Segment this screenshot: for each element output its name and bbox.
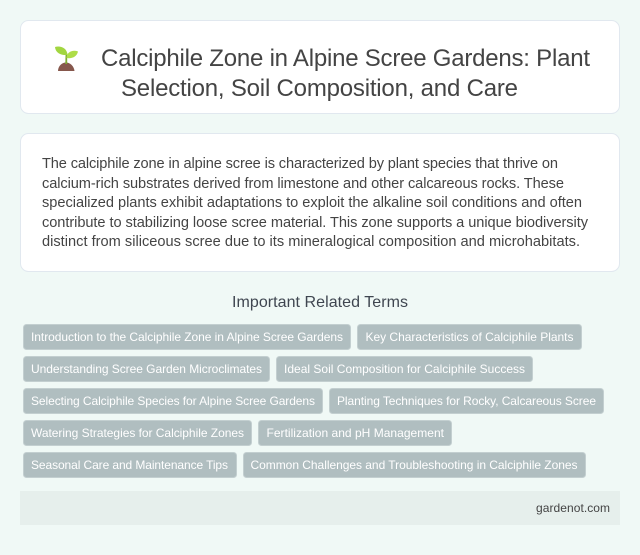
tag: Understanding Scree Garden Microclimates — [31, 362, 262, 376]
icon: seedling — [55, 47, 78, 71]
tag: Seasonal Care and Maintenance Tips — [31, 458, 228, 472]
footer domain: gardenot.com — [536, 501, 610, 515]
title card — [20, 20, 620, 114]
tag: Selecting Calciphile Species for Alpine Scree Gardens — [31, 394, 315, 408]
tag — [358, 324, 582, 350]
heading: related terms: Important Related Terms — [232, 294, 408, 311]
tag: Planting Techniques for Rocky, Calcareous Scree — [337, 394, 596, 408]
tag: Common Challenges and Troubleshooting in Calciphile Zones — [250, 458, 578, 472]
summary paragraph: distinct from siliceous scree due to its mineralogical composition and microhabitats. — [42, 234, 580, 250]
title text — [101, 45, 590, 102]
footer bar — [20, 491, 620, 525]
tag: Ideal Soil Composition for Calciphile Success — [284, 362, 525, 376]
summary paragraph — [42, 156, 589, 250]
summary card — [20, 134, 620, 272]
tag: Introduction to the Calciphile Zone in Alpine Scree Gardens — [31, 330, 343, 344]
summary paragraph: specialized plants exhibit adaptations to exploit the alkaline soil conditions and often — [42, 195, 582, 211]
tag — [24, 356, 270, 382]
tag — [24, 452, 236, 478]
tag: Watering Strategies for Calciphile Zones — [31, 426, 244, 440]
summary paragraph: contribute to stabilizing loose scree material. This zone supports a unique biodiversity — [42, 215, 589, 231]
title text: Calciphile Zone in Alpine Scree Gardens: Plant — [101, 45, 590, 72]
tag — [258, 420, 452, 446]
tags list — [24, 324, 604, 478]
summary paragraph: The calciphile zone in alpine scree is characterized by plant species that thrive on — [42, 156, 558, 172]
tag — [24, 420, 252, 446]
title text: Selection, Soil Composition, and Care — [121, 75, 518, 102]
tag — [244, 452, 586, 478]
summary paragraph: calcium-rich substrates derived from limestone and other calcareous rocks. These — [42, 176, 564, 192]
tag: Fertilization and pH Management — [266, 426, 445, 440]
tag — [276, 356, 532, 382]
tag: Key Characteristics of Calciphile Plants — [366, 330, 574, 344]
tag — [330, 388, 604, 414]
tag — [24, 324, 350, 350]
tag — [24, 388, 322, 414]
